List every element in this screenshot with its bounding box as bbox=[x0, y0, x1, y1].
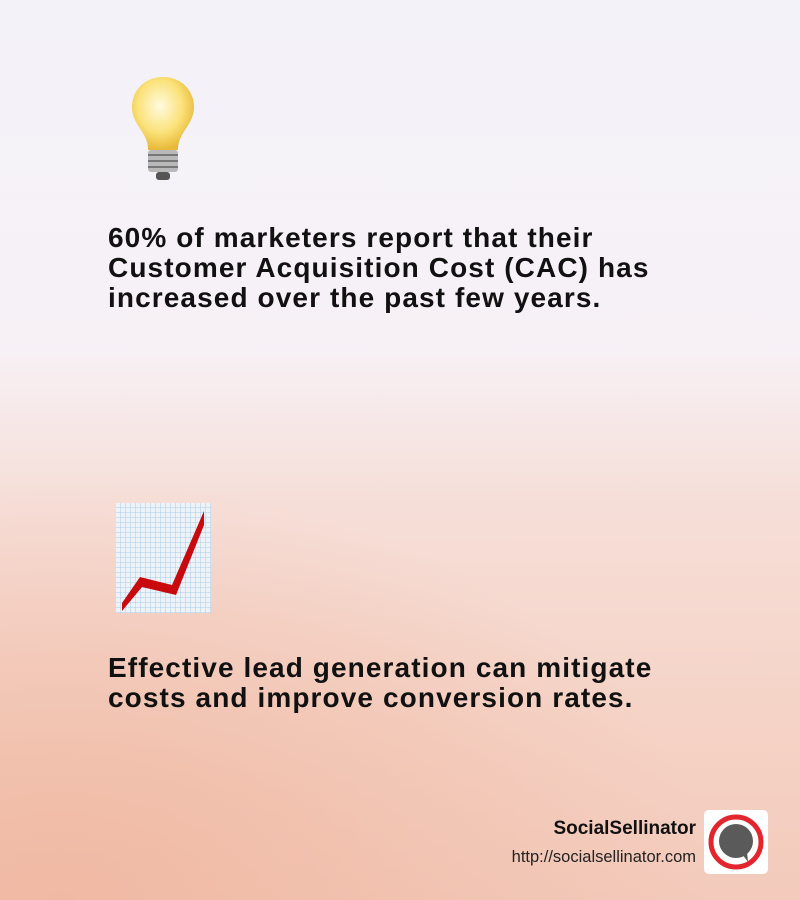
icon: chart increasing bbox=[116, 503, 211, 613]
logo bbox=[704, 810, 768, 874]
brand name: SocialSellinator bbox=[553, 818, 696, 839]
footer: brand bbox=[512, 810, 768, 874]
url: http://socialsellinator.com bbox=[512, 848, 696, 866]
text block: lead generation: costs and improve conversion rates. bbox=[108, 682, 634, 713]
text block: lead generation: Effective lead generation can mitigate bbox=[108, 652, 652, 683]
text block: CAC statistic: 60% of marketers report that their bbox=[108, 222, 594, 253]
text block: CAC statistic: increased over the past few years. bbox=[108, 282, 601, 313]
text block: CAC statistic bbox=[108, 222, 650, 313]
icon: light bulb bbox=[132, 77, 194, 180]
text block: lead generation bbox=[108, 652, 652, 713]
text block: CAC statistic: Customer Acquisition Cost (CAC) has bbox=[108, 252, 650, 283]
